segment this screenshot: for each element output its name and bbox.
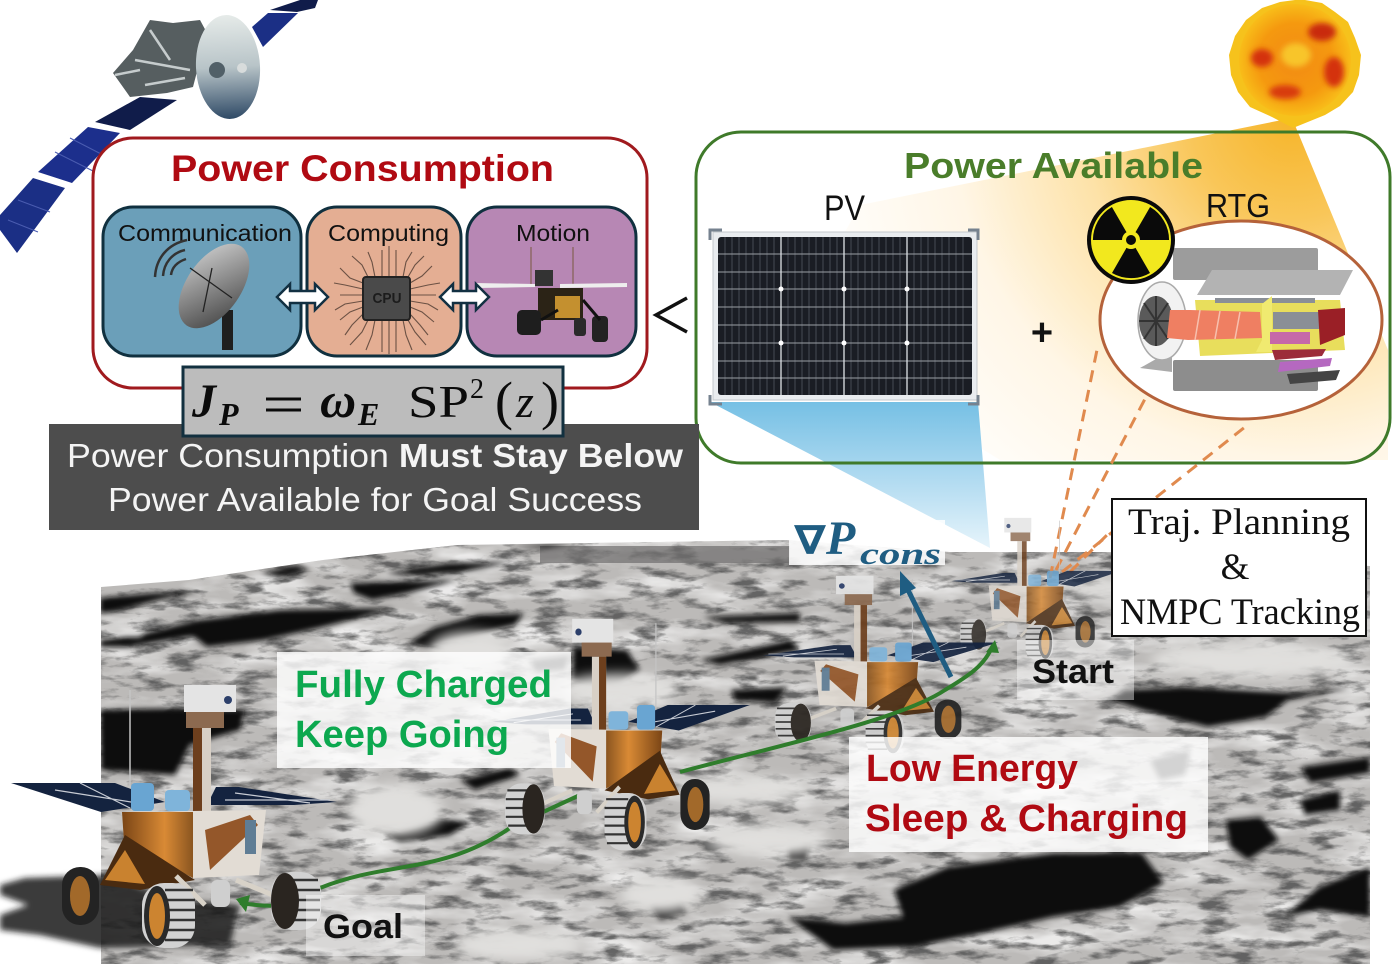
heading: power available: Power Available <box>904 145 1203 186</box>
label: goal <box>306 895 425 956</box>
rover: low energy <box>763 576 998 755</box>
rover: goal <box>11 685 337 948</box>
label: start: Start <box>1032 653 1114 691</box>
card: computing: CPU <box>372 290 402 307</box>
callout: fully charged <box>277 652 571 768</box>
panel: lunar surface <box>100 535 1371 964</box>
formula box: 2 <box>470 374 484 405</box>
label: gradient of power <box>789 512 945 571</box>
formula box: ω <box>320 372 356 428</box>
caption band: Power Available for Goal Success <box>108 481 642 518</box>
arrow: gradient direction <box>900 571 951 677</box>
card: motion: Motion <box>516 220 590 246</box>
yellow sunlight beam <box>790 118 1388 460</box>
formula box: SP <box>408 376 469 427</box>
callout: trajectory planning: & <box>1221 547 1250 588</box>
rover: charged <box>492 619 750 850</box>
formula box: z <box>515 376 534 427</box>
callout: trajectory planning <box>1112 499 1366 636</box>
formula box: J <box>191 375 218 428</box>
formula box: E <box>357 396 379 432</box>
card: motion <box>467 207 636 356</box>
icon: RTG cutaway <box>1100 221 1382 419</box>
panel: power available <box>696 132 1390 463</box>
panel: power consumption <box>93 138 647 388</box>
formula box <box>183 367 563 436</box>
dashed power lines <box>1050 345 1250 578</box>
callout: fully charged: Fully Charged <box>295 664 552 706</box>
callout: trajectory planning: NMPC Tracking <box>1120 592 1360 633</box>
caption band <box>49 424 699 530</box>
arrow: communication to computing <box>277 284 328 310</box>
icon: radiation symbol <box>1089 198 1173 282</box>
formula box: ) <box>541 371 559 431</box>
arrow: computing to motion <box>440 284 489 310</box>
label: PV: PV <box>824 189 866 228</box>
card: communication <box>103 207 301 356</box>
trajectory path: goal to start <box>236 640 999 912</box>
symbol: plus: + <box>1031 312 1053 354</box>
formula box: P <box>218 396 239 432</box>
icon: solar panel <box>710 230 978 404</box>
callout: trajectory planning: Traj. Planning <box>1128 502 1350 543</box>
card: computing: Computing <box>328 220 449 246</box>
formula box: ( <box>495 371 513 431</box>
label: gradient of power: ∇ <box>794 518 826 564</box>
blue sunlight beam from PV panel <box>710 402 990 548</box>
shadow of goal rover <box>0 875 240 948</box>
caption band: Power Consumption Must Stay Below <box>67 437 683 474</box>
callout: low energy: Low Energy <box>866 748 1078 790</box>
sun <box>1229 0 1361 128</box>
label: start <box>1017 640 1134 700</box>
heading: power consumption: Power Consumption <box>171 148 554 189</box>
callout: low energy <box>849 737 1208 852</box>
satellite <box>0 0 318 253</box>
card: communication: Communication <box>118 220 292 246</box>
rover: start <box>952 518 1121 660</box>
label: goal: Goal <box>323 908 403 946</box>
card: computing <box>307 207 461 356</box>
callout: low energy: Sleep & Charging <box>865 798 1188 840</box>
label: gradient of power: cons <box>860 536 941 571</box>
callout: fully charged: Keep Going <box>295 714 509 756</box>
label: gradient of power: P <box>825 512 856 565</box>
symbol: less than <box>656 298 687 332</box>
label: RTG: RTG <box>1206 187 1270 224</box>
